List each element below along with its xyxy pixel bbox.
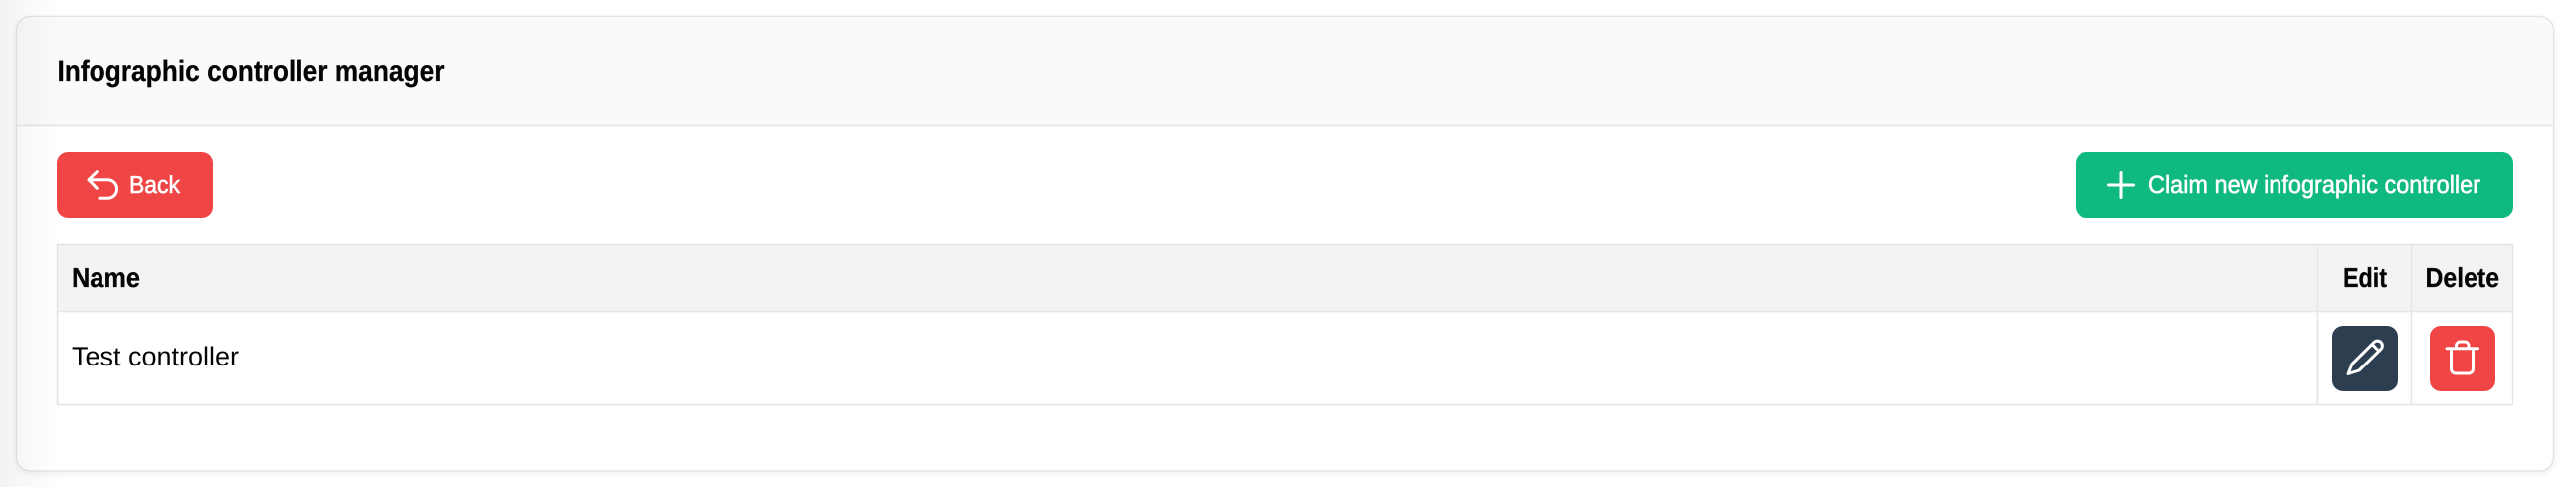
card header band [17,17,2553,125]
table header row [58,245,2513,311]
column heading: delete: Delete [2426,262,2499,293]
column heading: name: Name [72,262,140,293]
button: claim new infographic controller: Claim new infographic controller [2148,171,2480,199]
icon: trash can [2447,342,2477,373]
row text: test controller: Test controller [72,342,239,371]
button: edit [2332,326,2398,391]
icon: plus [2109,173,2133,197]
button: back [57,152,213,218]
button: back: Back [129,172,181,199]
button: claim new infographic controller [2076,152,2513,218]
button: delete [2430,326,2495,391]
heading: Infographic controller manager [58,55,445,88]
icon: pencil [2348,341,2382,374]
icon: back arrow [89,172,117,198]
column heading: edit: Edit [2343,262,2387,293]
table: controllers [58,245,2513,404]
